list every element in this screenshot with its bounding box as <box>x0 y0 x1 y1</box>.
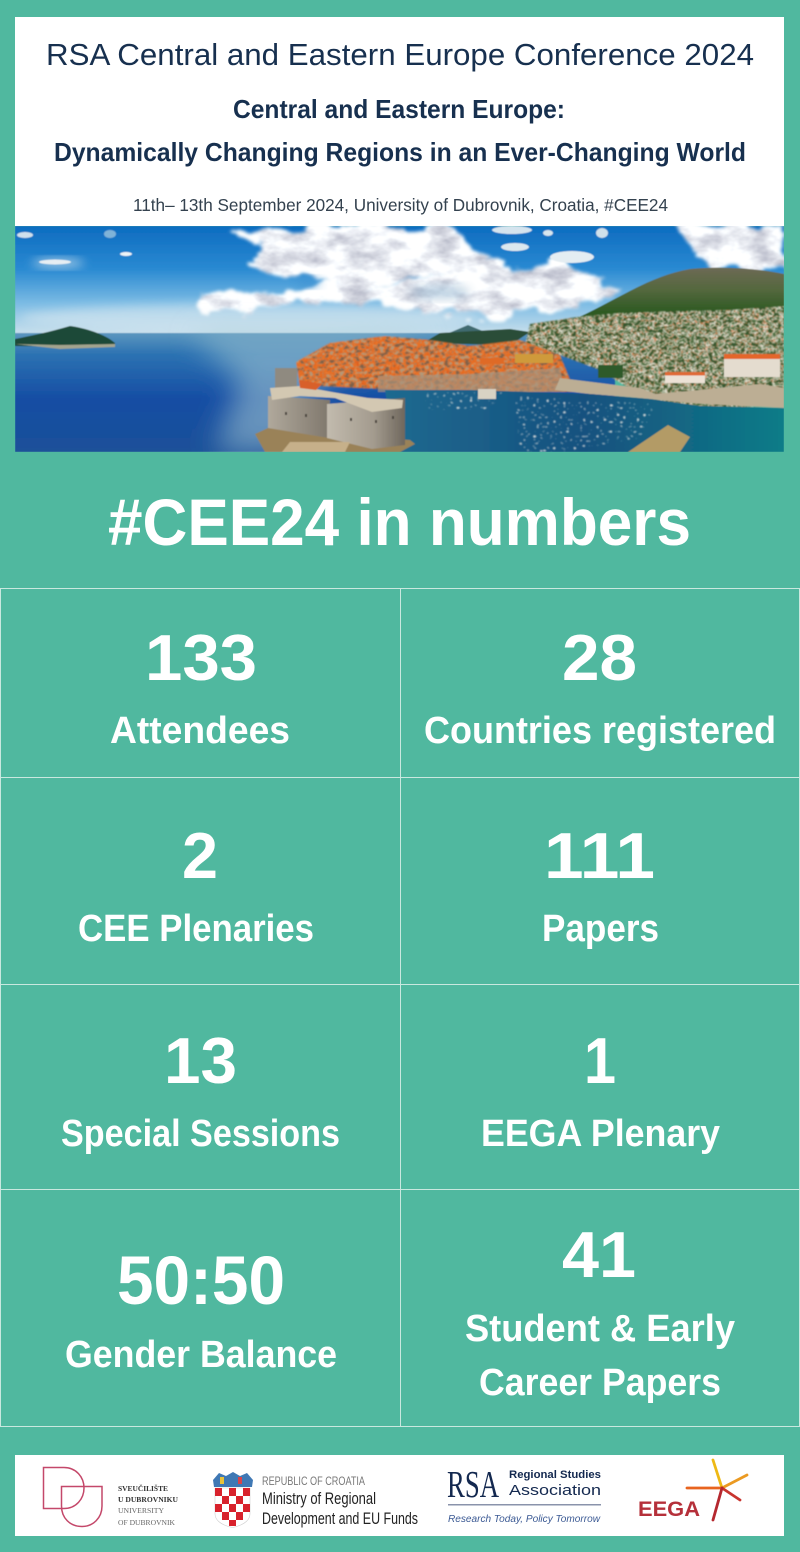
harbour water <box>385 390 784 452</box>
heading: #CEE24 in numbers: #CEE24 in numbers <box>108 485 691 559</box>
logo: EEGA: EEGA <box>638 1498 700 1521</box>
stat: 13 Special Sessions: Special Sessions <box>61 1113 340 1155</box>
logo: Ministry of Regional Development and EU Funds <box>213 1472 418 1528</box>
hillside houses <box>525 306 784 410</box>
logo: Regional Studies Association: Research Today, Policy Tomorrow <box>448 1513 601 1525</box>
stat: 111 Papers: Papers <box>542 908 659 950</box>
logo: Regional Studies Association: RSA <box>447 1464 499 1506</box>
breakwater <box>628 425 690 452</box>
stat: 1 EEGA Plenary <box>481 1024 720 1155</box>
stat: 41 Student and Early Career Papers: 41 <box>562 1218 636 1291</box>
stat: 2 CEE Plenaries: CEE Plenaries <box>78 908 314 950</box>
stat: 41 Student and Early Career Papers: Student & Early <box>465 1308 735 1350</box>
conference theme line 2: Dynamically Changing Regions in an Ever-Changing World <box>54 137 746 167</box>
sun glare on water <box>190 333 430 452</box>
conference title: RSA Central and Eastern Europe Conference 2024 <box>46 37 754 72</box>
photo: aerial panorama of Dubrovnik <box>15 226 784 452</box>
logo strip <box>15 1455 784 1536</box>
logo: Ministry of Regional Development and EU Funds: REPUBLIC OF CROATIA <box>262 1476 365 1488</box>
large white building <box>598 354 780 383</box>
stat: 1 EEGA Plenary: EEGA Plenary <box>481 1113 720 1155</box>
clouds <box>17 226 784 332</box>
stat: 133 Attendees: 133 <box>145 621 257 694</box>
stat: 50:50 Gender Balance: 50:50 <box>117 1242 285 1319</box>
sky <box>15 226 784 334</box>
logo: Regional Studies Association <box>447 1464 601 1525</box>
logo: University of Dubrovnik: UNIVERSITY <box>118 1506 165 1515</box>
stat: 111 Papers: 111 <box>544 819 655 892</box>
conference theme line 1: Central and Eastern Europe: <box>233 94 565 124</box>
old town walls <box>378 368 565 392</box>
logo: University of Dubrovnik: U DUBROVNIKU <box>118 1495 179 1504</box>
fort of St John <box>255 368 415 452</box>
stat: 13 Special Sessions: 13 <box>164 1024 237 1097</box>
sea <box>15 333 615 452</box>
stat: 28 Countries registered <box>424 621 776 752</box>
stat: 28 Countries registered: 28 <box>562 621 637 694</box>
stat: 133 Attendees: Attendees <box>110 710 290 752</box>
icon: Croatian coat of arms <box>213 1472 253 1528</box>
stat: 13 Special Sessions <box>61 1024 340 1155</box>
logo: Ministry of Regional Development and EU Funds: Ministry of Regional <box>262 1490 376 1508</box>
header panel: conference banner <box>15 17 784 226</box>
logo: University of Dubrovnik <box>44 1468 179 1527</box>
stat: 1 EEGA Plenary: 1 <box>584 1024 616 1097</box>
icon: EEGA star <box>687 1460 747 1520</box>
island of Lokrum <box>15 326 115 349</box>
stat: 50:50 Gender Balance <box>65 1242 337 1376</box>
mountain Srd <box>577 268 784 330</box>
logo: EEGA <box>638 1460 747 1521</box>
stat: 111 Papers <box>542 819 659 950</box>
stat: 41 Student and Early Career Papers <box>465 1218 735 1404</box>
city walls <box>555 378 784 408</box>
stat: 2 CEE Plenaries <box>78 819 314 950</box>
logo: Regional Studies Association: Association <box>509 1482 601 1499</box>
logo: University of Dubrovnik: SVEUČILIŠTE <box>118 1483 168 1493</box>
logo: Regional Studies Association: Regional Studies <box>509 1469 601 1481</box>
logo: Ministry of Regional Development and EU Funds: Development and EU Funds <box>262 1510 418 1528</box>
logo: University of Dubrovnik: OF DUBROVNIK <box>118 1518 176 1527</box>
stat: 41 Student and Early Career Papers: Career Papers <box>479 1362 721 1404</box>
date and location: 11th– 13th September 2024, University of Dubrovnik, Croatia, #CEE24 <box>133 195 668 215</box>
moored boats <box>515 396 655 452</box>
stat: 28 Countries registered: Countries registered <box>424 710 776 752</box>
distant hill <box>449 325 485 333</box>
old town roofs <box>296 336 575 392</box>
stat: 133 Attendees <box>110 621 290 752</box>
stats grid lines <box>0 588 800 1427</box>
stat: 2 CEE Plenaries: 2 <box>182 819 218 892</box>
stat: 50:50 Gender Balance: Gender Balance <box>65 1334 337 1376</box>
